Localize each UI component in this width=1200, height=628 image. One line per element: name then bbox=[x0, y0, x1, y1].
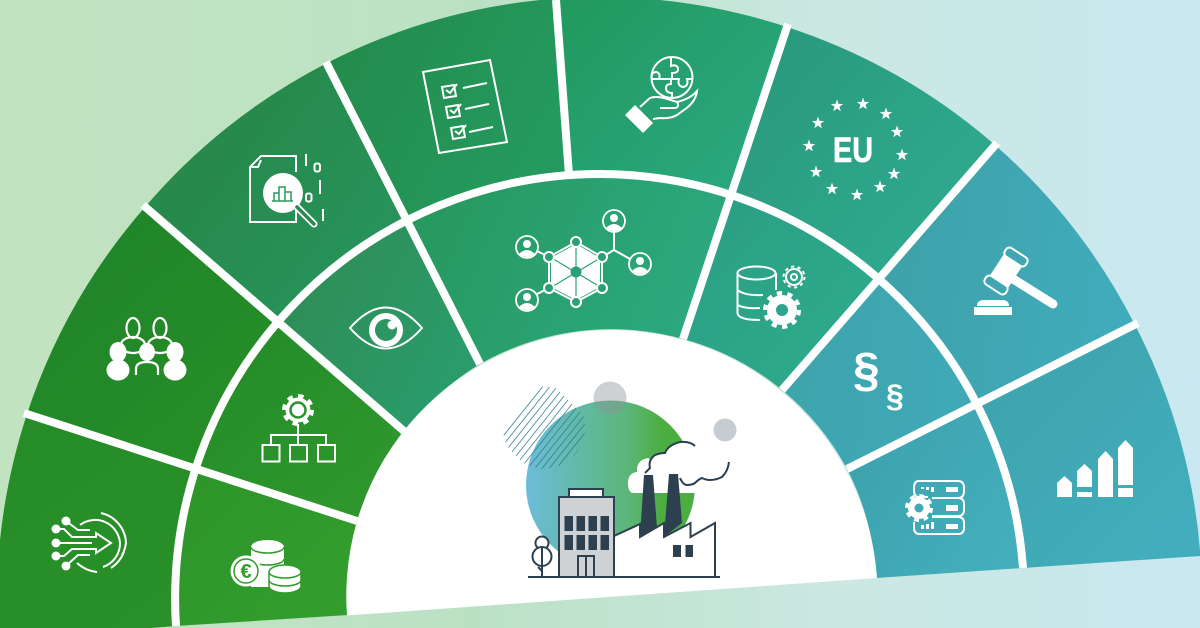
icon: paragraph signs: § bbox=[886, 378, 904, 414]
panel: outer ring, puzzle in hand bbox=[556, 0, 787, 190]
icon: eye bbox=[350, 308, 422, 348]
panel: inner ring, paragraphs bbox=[782, 277, 977, 469]
panel: outer ring, document analysis bbox=[145, 63, 408, 322]
panel: inner ring, eye bbox=[277, 222, 480, 432]
icon: rising arrow bars bbox=[1057, 440, 1133, 497]
globe circle with gradient bbox=[526, 400, 695, 552]
icon: gavel bbox=[974, 246, 1053, 315]
icon: server stack with gear bbox=[907, 481, 964, 534]
factory bbox=[614, 474, 715, 577]
icon: EU ring of stars bbox=[803, 98, 908, 200]
icon: gear with org chart bbox=[262, 396, 335, 462]
panel: inner ring, coins bbox=[175, 468, 357, 626]
ground line bbox=[528, 576, 720, 578]
office building bbox=[559, 489, 614, 577]
icon: database with gears bbox=[738, 266, 804, 327]
illustration: factory and office building bbox=[500, 380, 736, 577]
icon: paragraph signs: § bbox=[853, 344, 880, 397]
icon: hand holding puzzle bbox=[625, 57, 697, 133]
panel: inner ring, network bbox=[408, 173, 731, 364]
icon: paragraph signs bbox=[853, 344, 904, 414]
panel: inner ring, server with gear bbox=[847, 403, 1023, 578]
smoke cloud bbox=[628, 442, 730, 493]
hatched circle bbox=[504, 386, 585, 468]
panel: inner ring, database gears bbox=[683, 190, 878, 390]
panel: outer ring, checklist bbox=[327, 0, 569, 222]
panel: outer ring, digital arrow bbox=[0, 414, 193, 628]
panel: outer ring, rising bars bbox=[977, 325, 1200, 568]
icon: EU ring of stars: EU bbox=[833, 131, 873, 170]
icon: document with magnifier and binary bbox=[250, 154, 323, 224]
panel: outer ring, gavel bbox=[878, 145, 1135, 403]
panel: outer ring, team bbox=[27, 207, 277, 468]
center white semicircle bbox=[346, 330, 877, 616]
icon: digital circuit arrow bbox=[52, 513, 126, 572]
grey circles bbox=[594, 382, 626, 414]
panel: outer ring, EU stars bbox=[731, 27, 995, 277]
icon: hexagon network of people bbox=[516, 210, 651, 311]
icon: team of people bbox=[106, 318, 186, 380]
icon: euro coins: € bbox=[240, 561, 252, 583]
icon: checklist bbox=[423, 60, 507, 153]
tree bbox=[532, 536, 552, 577]
panel: inner ring, org chart gear bbox=[193, 322, 405, 521]
icon: euro coins bbox=[230, 540, 301, 593]
